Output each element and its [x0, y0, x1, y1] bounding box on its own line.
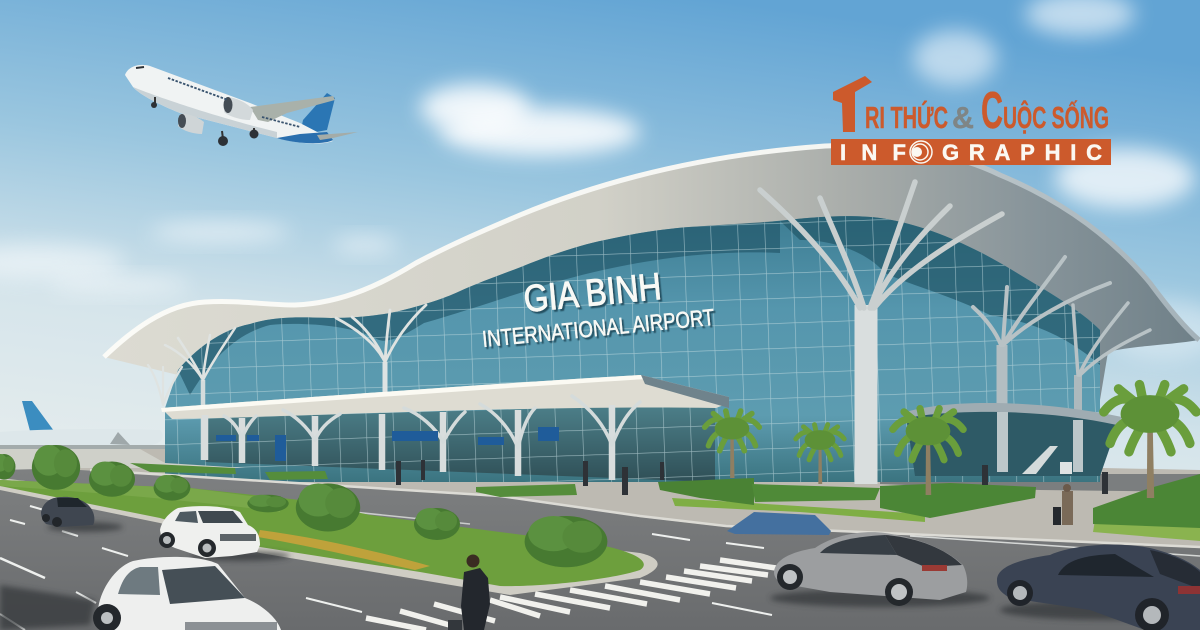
airplane in flight	[125, 65, 358, 146]
blue wayfinding signs	[216, 427, 559, 461]
parked planes at the far left	[0, 401, 170, 450]
car: white sedan	[159, 506, 260, 558]
logo wordmark: RI THỨC	[865, 99, 948, 135]
logo: Tri Thuc & Cuoc Song Infographic	[831, 76, 1111, 165]
airplane fuselage	[125, 65, 333, 144]
lobby glazing	[205, 404, 715, 482]
logo target icon	[910, 141, 932, 163]
dark reflection band on glass, right	[780, 216, 1100, 365]
clouds	[0, 0, 1200, 360]
plaza apron left side	[0, 449, 245, 470]
car: white sedan foreground	[93, 557, 281, 630]
airplane blue belly	[277, 132, 333, 143]
ground: apron and plaza	[0, 449, 1200, 570]
main road	[0, 462, 1200, 630]
airplane wing	[250, 96, 335, 122]
logo banner text	[840, 140, 1102, 165]
airplane belly shade	[133, 87, 277, 138]
dark reflection band on glass, centre-left	[178, 221, 780, 395]
logo banner	[831, 139, 1111, 165]
airplane landing gear	[155, 97, 254, 139]
logo wordmark: C	[981, 82, 1003, 140]
airport sign	[481, 266, 715, 352]
dark paving by the terminal	[880, 474, 1200, 492]
sign: GIA BINH: GIA BINH	[522, 266, 663, 321]
car: dark sedan far left	[41, 497, 94, 527]
distant trees	[166, 430, 214, 462]
logo wordmark: UỘC SỐNG	[1003, 99, 1109, 135]
logo banner text: GRAPHIC	[942, 140, 1102, 165]
terminal building	[104, 146, 1199, 484]
car: silver sedan	[774, 532, 967, 606]
person with suitcase in foreground	[448, 554, 490, 630]
entrance canopy	[161, 375, 729, 419]
shrubs	[154, 475, 190, 501]
median island with grass	[0, 478, 658, 595]
logo banner text: INF	[840, 140, 906, 165]
airplane tailplane	[317, 132, 358, 140]
road curb lines	[90, 470, 1200, 547]
airplane windows	[168, 78, 300, 127]
side canopy at right	[903, 403, 1122, 476]
logo T mark	[833, 76, 872, 132]
zebra crossing	[366, 560, 776, 630]
car: dark sedan right	[997, 545, 1200, 630]
covered luggage on road	[727, 512, 831, 535]
people	[396, 460, 1108, 525]
roof top edge	[104, 146, 1199, 357]
sign: INTERNATIONAL AIRPORT: INTERNATIONAL AIRPORT	[481, 304, 715, 352]
canopy columns	[205, 396, 640, 480]
car shadows	[0, 522, 1200, 630]
airplane engines	[224, 97, 253, 120]
road markings	[0, 489, 1200, 630]
planting beds	[130, 463, 1200, 541]
palm trees	[705, 411, 759, 478]
large tree columns	[148, 182, 1150, 484]
logo wordmark: &	[952, 100, 974, 135]
cars	[41, 497, 1200, 630]
airplane tail fin	[300, 93, 335, 135]
glass grid	[165, 216, 1100, 482]
logo wordmark	[865, 82, 1109, 140]
glass facade	[165, 216, 1100, 482]
roof underside	[104, 146, 1199, 400]
